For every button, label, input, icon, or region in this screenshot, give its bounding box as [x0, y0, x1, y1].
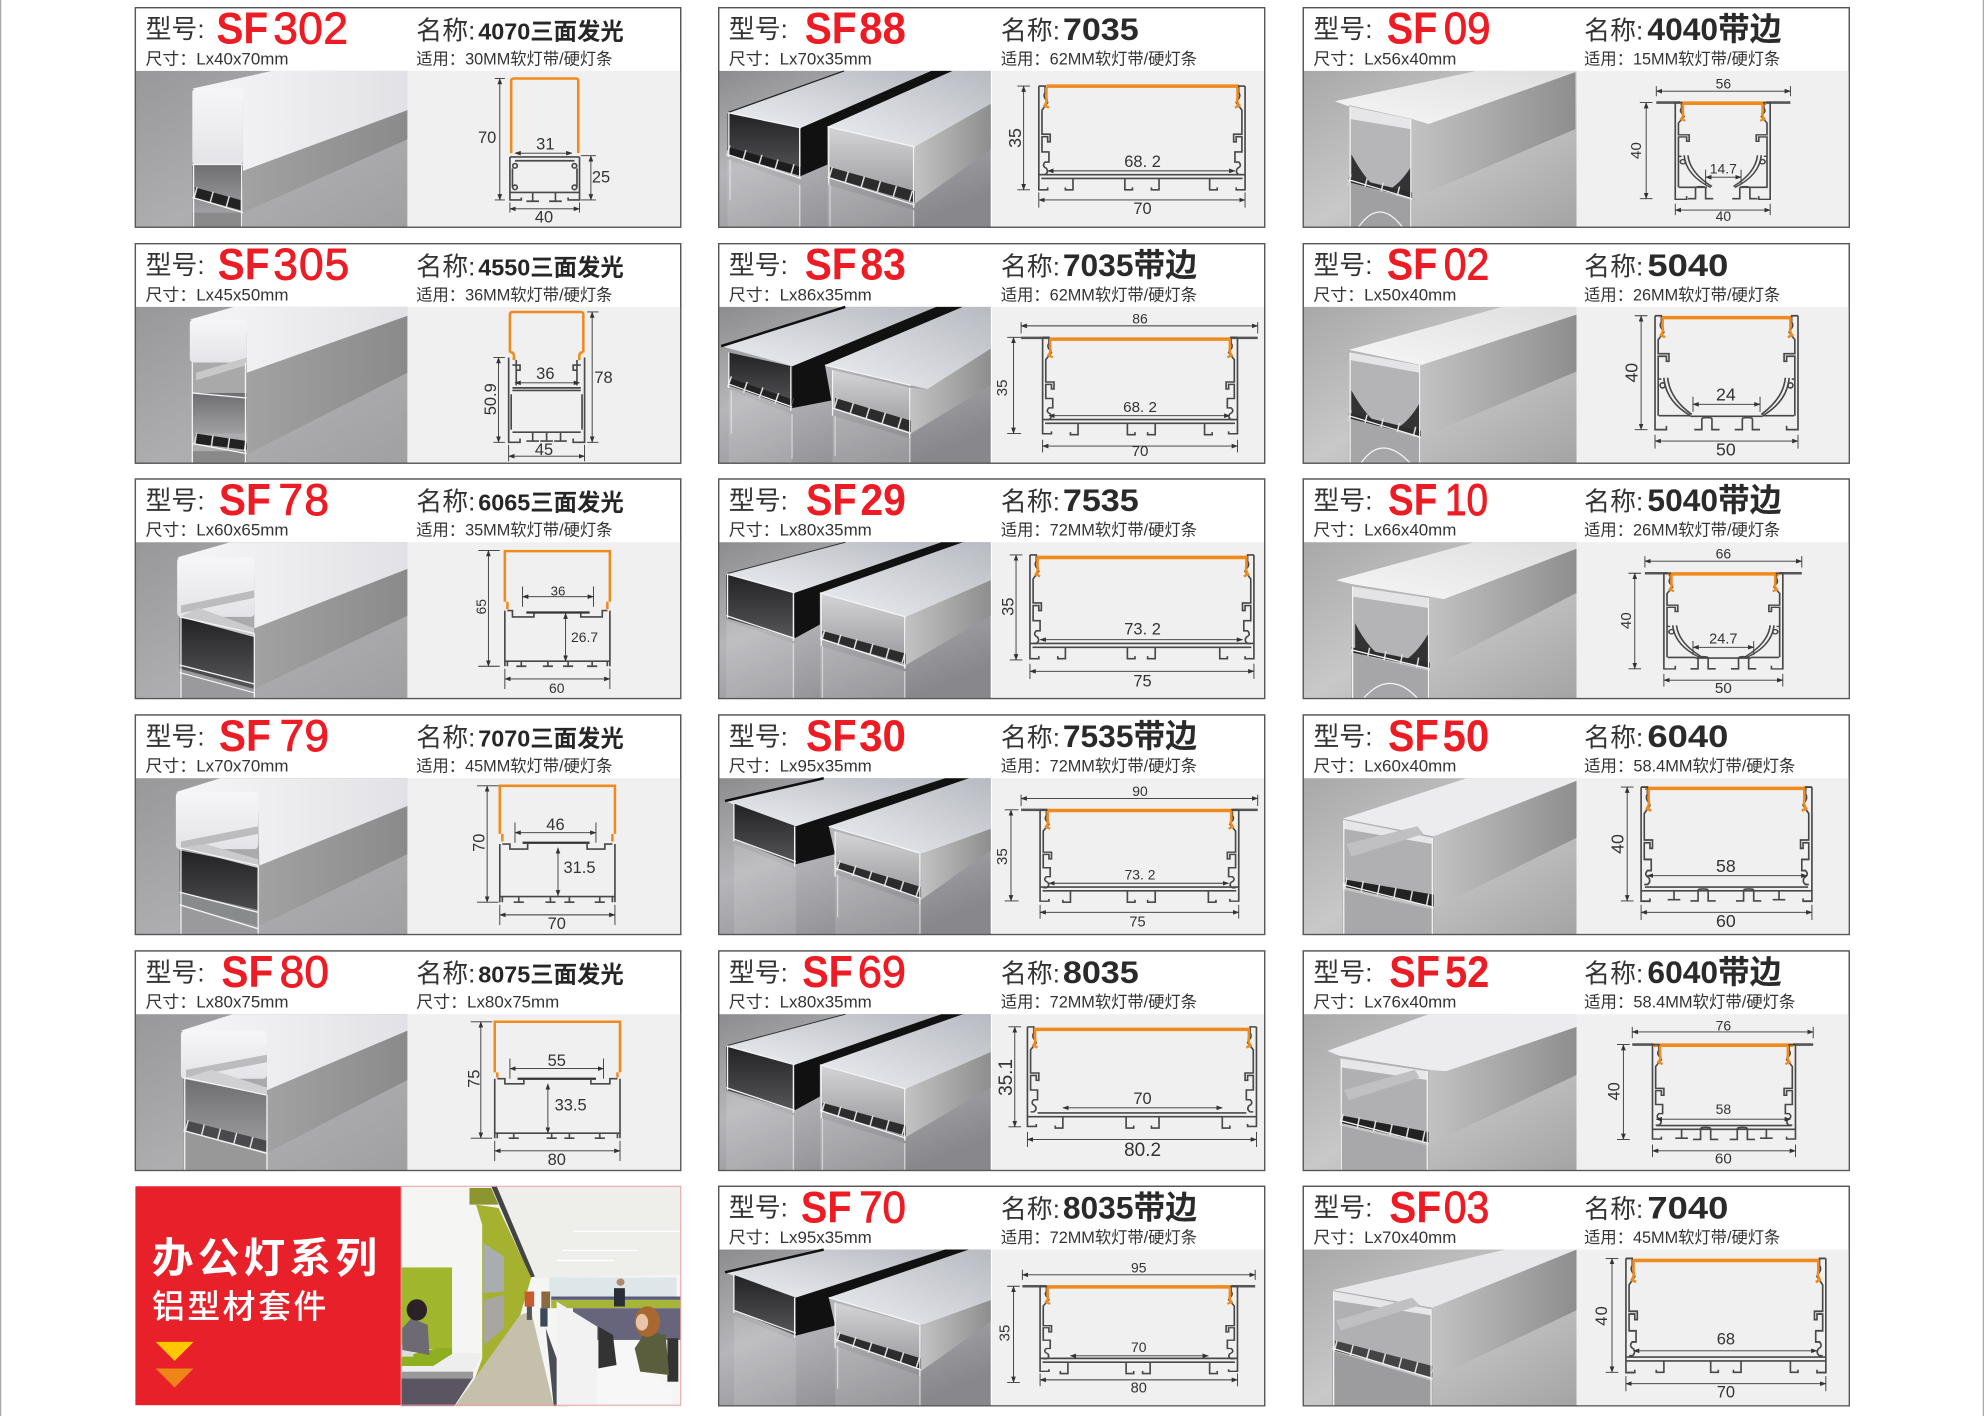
- fit text: 适用：72MM软灯带/硬灯条: [1001, 522, 1197, 540]
- model number: 302: [273, 5, 348, 54]
- panel: SF09: [1303, 5, 1849, 228]
- cross-section diagram: 40: [1593, 1305, 1611, 1326]
- size text: 尺寸：Lx70x40mm: [1313, 1229, 1456, 1247]
- name value: 6065三面发光: [478, 490, 624, 516]
- product photo: [719, 307, 991, 463]
- banner title: 办公灯系列: [152, 1234, 377, 1281]
- model number: [219, 476, 329, 525]
- panel: SF50: [1303, 712, 1849, 935]
- model number: [1387, 5, 1491, 54]
- name value: 4070三面发光: [478, 18, 624, 44]
- model number: [806, 712, 906, 761]
- red title block: [135, 1186, 401, 1405]
- panel: SF69: [719, 948, 1265, 1170]
- model number: [805, 241, 906, 290]
- fit text: 尺寸：Lx80x75mm: [416, 994, 559, 1012]
- size text: 尺寸：Lx80x35mm: [729, 994, 872, 1012]
- model label: 型号:: [1313, 251, 1372, 280]
- cross-section diagram: 24.7: [1709, 631, 1738, 647]
- model number: 305: [273, 241, 349, 290]
- name value: 8035带边: [1063, 1190, 1197, 1226]
- model number: SF: [216, 5, 268, 54]
- model number: [802, 948, 906, 997]
- model number: 70: [859, 1183, 906, 1232]
- cross-section diagram: 50.9: [482, 383, 500, 415]
- name label: 名称:: [1001, 252, 1060, 281]
- size text: 尺寸：Lx86x35mm: [729, 286, 872, 304]
- name value: 7535: [1063, 482, 1139, 518]
- model number: 52: [1445, 948, 1489, 997]
- fit text: 适用：72MM软灯带/硬灯条: [1001, 758, 1197, 776]
- size text: 尺寸：Lx45x50mm: [146, 286, 288, 304]
- fit text: 适用：30MM软灯带/硬灯条: [416, 50, 612, 68]
- fit text: 适用：72MM软灯带/硬灯条: [1001, 994, 1197, 1012]
- office photo: [401, 1186, 680, 1406]
- cross-section diagram: 35: [997, 1325, 1014, 1342]
- fit text: 适用：62MM软灯带/硬灯条: [1001, 286, 1197, 304]
- model label: 型号:: [1313, 722, 1372, 751]
- cross-section diagram: 24: [1716, 385, 1736, 405]
- panel: SF88: [719, 5, 1265, 227]
- icon: orange down triangle: [156, 1368, 194, 1387]
- size text: 尺寸：Lx66x40mm: [1313, 522, 1456, 540]
- name value: 8075三面发光: [478, 962, 624, 988]
- banner subtitle: 铝型材套件: [152, 1288, 326, 1325]
- cross-section diagram: 68: [1717, 1330, 1735, 1348]
- model label: 型号:: [1313, 486, 1372, 515]
- name value: 5040带边: [1647, 482, 1782, 518]
- model label: 型号:: [146, 722, 205, 751]
- cross-section diagram: 46: [546, 816, 565, 834]
- size text: 尺寸：Lx95x35mm: [729, 758, 872, 776]
- model number: SF: [805, 5, 857, 54]
- cross-section diagram: 40: [535, 209, 553, 227]
- model label: 型号:: [1313, 958, 1372, 987]
- product photo: [135, 1014, 407, 1170]
- cross-section diagram: 66: [1716, 546, 1731, 562]
- name value: 4040带边: [1647, 11, 1782, 47]
- cross-section diagram: 60: [1716, 911, 1736, 931]
- cross-section diagram: 58: [1716, 1101, 1731, 1117]
- cross-section diagram: [1577, 71, 1849, 227]
- model label: 型号:: [146, 486, 205, 515]
- cross-section diagram: [407, 778, 681, 934]
- cross-section diagram: 56: [1716, 76, 1731, 92]
- panel: SF03: [1303, 1183, 1849, 1406]
- model number: 83: [860, 241, 906, 290]
- cross-section diagram: 36: [536, 365, 554, 383]
- name label: 名称:: [416, 488, 475, 517]
- model number: 69: [858, 948, 906, 997]
- model number: [216, 5, 348, 54]
- panel: SF29: [719, 476, 1265, 699]
- model number: SF: [1387, 5, 1437, 54]
- name label: 名称:: [416, 252, 475, 281]
- cross-section diagram: 70: [1131, 1339, 1147, 1355]
- product photo: [1303, 1014, 1577, 1171]
- cross-section diagram: 45: [535, 441, 553, 459]
- cross-section diagram: 35: [1005, 128, 1025, 148]
- cross-section diagram: 55: [548, 1052, 566, 1070]
- model number: SF: [801, 1183, 852, 1232]
- model number: 03: [1444, 1183, 1489, 1232]
- product photo: [1303, 542, 1577, 699]
- model number: [805, 5, 906, 54]
- cross-section diagram: 60: [549, 680, 565, 696]
- model number: SF: [805, 241, 857, 290]
- size text: 尺寸：Lx56x40mm: [1313, 50, 1456, 68]
- icon: yellow down triangle: [156, 1342, 194, 1361]
- model label: 型号:: [1313, 1194, 1372, 1223]
- cross-section diagram: [1577, 1014, 1849, 1170]
- cross-section diagram: 75: [1129, 914, 1146, 930]
- cross-section diagram: 80: [1131, 1381, 1147, 1397]
- model number: [221, 948, 329, 997]
- model number: SF: [1389, 948, 1440, 997]
- name value: 8035: [1063, 954, 1139, 990]
- panel: SF80: [135, 948, 681, 1170]
- panel: SF30: [719, 712, 1265, 934]
- model number: [1389, 948, 1489, 997]
- name label: 名称:: [1001, 1195, 1060, 1224]
- cross-section diagram: 40: [1716, 208, 1731, 224]
- cross-section diagram: 40: [1618, 612, 1635, 629]
- name value: 4550三面发光: [478, 254, 624, 280]
- cross-section diagram: [407, 1014, 681, 1170]
- model number: SF: [802, 948, 853, 997]
- product photo: [719, 1014, 991, 1170]
- model number: [219, 712, 329, 761]
- name label: 名称:: [1001, 488, 1060, 517]
- panel: SF70: [719, 1183, 1265, 1406]
- cross-section diagram: 31.5: [564, 859, 596, 877]
- cross-section diagram: [407, 542, 681, 699]
- name value: 7040: [1647, 1190, 1728, 1226]
- model number: SF: [219, 476, 271, 525]
- cross-section diagram: [407, 307, 681, 463]
- cross-section diagram: 70: [478, 129, 496, 147]
- panel: SF79: [135, 712, 681, 934]
- fit text: 适用：62MM软灯带/硬灯条: [1001, 50, 1197, 68]
- panel: SF52: [1303, 948, 1849, 1171]
- cross-section diagram: 68. 2: [1124, 153, 1161, 171]
- model label: 型号:: [729, 1194, 788, 1223]
- product photo: [719, 542, 991, 699]
- model number: [801, 1183, 906, 1232]
- product photo: [135, 778, 407, 934]
- cross-section diagram: 70: [471, 834, 489, 852]
- cross-section diagram: 75: [466, 1070, 484, 1088]
- cross-section diagram: [407, 71, 681, 227]
- panel: office series banner: [135, 1186, 681, 1406]
- cross-section diagram: 40: [1606, 1082, 1624, 1101]
- model number: 10: [1445, 476, 1488, 525]
- product photo: [1303, 778, 1577, 935]
- fit text: 适用：35MM软灯带/硬灯条: [416, 522, 612, 540]
- model label: 型号:: [146, 15, 205, 44]
- name label: 名称:: [1584, 1195, 1643, 1224]
- name label: 名称:: [1584, 488, 1643, 517]
- cross-section diagram: 90: [1132, 783, 1148, 799]
- size text: 尺寸：Lx40x70mm: [146, 50, 288, 68]
- size text: 尺寸：Lx60x65mm: [146, 522, 288, 540]
- size text: 尺寸：Lx80x35mm: [729, 522, 872, 540]
- product photo: [135, 307, 407, 463]
- name label: 名称:: [416, 960, 475, 989]
- model label: 型号:: [729, 15, 788, 44]
- cross-section diagram: 33.5: [555, 1096, 587, 1114]
- cross-section diagram: 40: [1621, 363, 1641, 383]
- model number: SF: [1388, 476, 1437, 525]
- model number: 80: [280, 948, 329, 997]
- product photo: [719, 1250, 991, 1406]
- name value: 6040带边: [1647, 954, 1782, 990]
- cross-section diagram: 70: [1717, 1384, 1735, 1402]
- name label: 名称:: [416, 724, 475, 753]
- product photo: [1303, 307, 1577, 464]
- model number: [806, 476, 906, 525]
- model label: 型号:: [729, 486, 788, 515]
- cross-section diagram: 73. 2: [1125, 866, 1156, 882]
- cross-section diagram: 78: [594, 369, 613, 387]
- cross-section diagram: [992, 71, 1265, 227]
- model label: 型号:: [729, 722, 788, 751]
- model number: 29: [860, 476, 906, 525]
- panel: SF78: [135, 476, 681, 699]
- cross-section diagram: 25: [592, 168, 610, 186]
- model number: SF: [1387, 241, 1437, 290]
- name label: 名称:: [1001, 724, 1060, 753]
- model number: SF: [219, 712, 271, 761]
- model number: 02: [1444, 241, 1489, 290]
- cross-section diagram: 60: [1715, 1151, 1732, 1168]
- cross-section diagram: 50: [1716, 440, 1736, 460]
- fit text: 适用：45MM软灯带/硬灯条: [416, 758, 612, 776]
- name value: 6040: [1647, 718, 1728, 754]
- model label: 型号:: [729, 251, 788, 280]
- model number: 09: [1444, 5, 1491, 54]
- model number: [1388, 476, 1488, 525]
- cross-section diagram: [992, 1014, 1265, 1170]
- model label: 型号:: [1313, 15, 1372, 44]
- name value: 7535带边: [1063, 718, 1197, 754]
- name value: 7035带边: [1063, 247, 1197, 283]
- cross-section diagram: 58: [1716, 856, 1736, 876]
- model number: 50: [1442, 712, 1489, 761]
- cross-section diagram: 73. 2: [1124, 621, 1161, 639]
- product photo: [1303, 1250, 1577, 1406]
- size text: 尺寸：Lx70x70mm: [146, 758, 288, 776]
- cross-section diagram: 14.7: [1710, 160, 1737, 176]
- fit text: 适用：26MM软灯带/硬灯条: [1584, 522, 1780, 540]
- cross-section diagram: 68. 2: [1123, 399, 1157, 416]
- fit text: 适用：45MM软灯带/硬灯条: [1584, 1229, 1780, 1247]
- cross-section diagram: 86: [1132, 310, 1148, 326]
- cross-section diagram: 40: [1607, 834, 1627, 854]
- name value: 7035: [1063, 11, 1139, 47]
- cross-section diagram: 35: [994, 379, 1011, 396]
- product photo: [135, 542, 407, 699]
- cross-section diagram: [992, 778, 1265, 934]
- cross-section diagram: [1577, 542, 1849, 699]
- panel: SF83: [719, 241, 1265, 463]
- model number: [218, 241, 349, 290]
- panel: SF10: [1303, 476, 1849, 699]
- product photo: [135, 71, 407, 227]
- cross-section diagram: 36: [551, 583, 565, 598]
- model number: 88: [859, 5, 906, 54]
- cross-section diagram: [992, 307, 1265, 463]
- fit text: 适用：58.4MM软灯带/硬灯条: [1584, 758, 1795, 776]
- size text: 尺寸：Lx70x35mm: [729, 50, 872, 68]
- model label: 型号:: [146, 251, 205, 280]
- fit text: 适用：58.4MM软灯带/硬灯条: [1584, 994, 1795, 1012]
- name label: 名称:: [416, 16, 475, 45]
- size text: 尺寸：Lx50x40mm: [1313, 286, 1456, 304]
- cross-section diagram: 26.7: [571, 629, 598, 645]
- model number: [1387, 241, 1489, 290]
- cross-section diagram: [1577, 1250, 1849, 1406]
- size text: 尺寸：Lx60x40mm: [1313, 758, 1456, 776]
- name label: 名称:: [1001, 960, 1060, 989]
- size text: 尺寸：Lx80x75mm: [146, 994, 288, 1012]
- cross-section diagram: 31: [536, 135, 554, 153]
- name label: 名称:: [1584, 16, 1643, 45]
- cross-section diagram: 70: [1132, 443, 1148, 460]
- cross-section diagram: 50: [1715, 680, 1732, 697]
- panel: SF02: [1303, 241, 1849, 464]
- cross-section diagram: [992, 542, 1265, 699]
- model number: SF: [218, 241, 270, 290]
- cross-section diagram: [1577, 778, 1849, 934]
- size text: 尺寸：Lx76x40mm: [1313, 994, 1456, 1012]
- cross-section diagram: 35.1: [996, 1059, 1017, 1096]
- cross-section diagram: 70: [1133, 200, 1152, 218]
- fit text: 适用：26MM软灯带/硬灯条: [1584, 286, 1780, 304]
- model number: SF: [1388, 712, 1439, 761]
- cross-section diagram: [992, 1250, 1265, 1406]
- product photo: [719, 71, 991, 227]
- fit text: 适用：36MM软灯带/硬灯条: [416, 286, 612, 304]
- model number: 78: [278, 476, 329, 525]
- cross-section diagram: 80.2: [1124, 1140, 1161, 1161]
- model number: SF: [1389, 1183, 1441, 1232]
- cross-section diagram: 76: [1716, 1018, 1731, 1034]
- model number: [1388, 712, 1489, 761]
- panel: SF305: [135, 241, 681, 463]
- cross-section diagram: 70: [548, 915, 566, 933]
- model label: 型号:: [729, 958, 788, 987]
- model number: [1389, 1183, 1489, 1232]
- cross-section diagram: 75: [1133, 672, 1152, 690]
- name label: 名称:: [1584, 252, 1643, 281]
- fit text: 适用：72MM软灯带/硬灯条: [1001, 1229, 1197, 1247]
- size text: 尺寸：Lx95x35mm: [729, 1229, 872, 1247]
- cross-section diagram: 70: [1133, 1090, 1152, 1108]
- product photo: [1303, 71, 1577, 228]
- name label: 名称:: [1001, 16, 1060, 45]
- model number: 79: [280, 712, 329, 761]
- name value: 5040: [1647, 247, 1728, 283]
- name label: 名称:: [1584, 960, 1643, 989]
- cross-section diagram: 80: [548, 1151, 566, 1169]
- model number: SF: [806, 476, 857, 525]
- cross-section diagram: [1577, 307, 1849, 463]
- product photo: [719, 778, 991, 934]
- model number: SF: [806, 712, 857, 761]
- name label: 名称:: [1584, 724, 1643, 753]
- cross-section diagram: 95: [1131, 1259, 1147, 1275]
- panel: SF302: [135, 5, 681, 227]
- cross-section diagram: 40: [1628, 142, 1645, 159]
- fit text: 适用：15MM软灯带/硬灯条: [1584, 50, 1780, 68]
- cross-section diagram: 35: [1000, 598, 1018, 616]
- model label: 型号:: [146, 958, 205, 987]
- cross-section diagram: 65: [473, 599, 489, 615]
- name value: 7070三面发光: [478, 726, 624, 752]
- cross-section diagram: 35: [994, 848, 1011, 865]
- model number: 30: [859, 712, 906, 761]
- model number: SF: [221, 948, 273, 997]
